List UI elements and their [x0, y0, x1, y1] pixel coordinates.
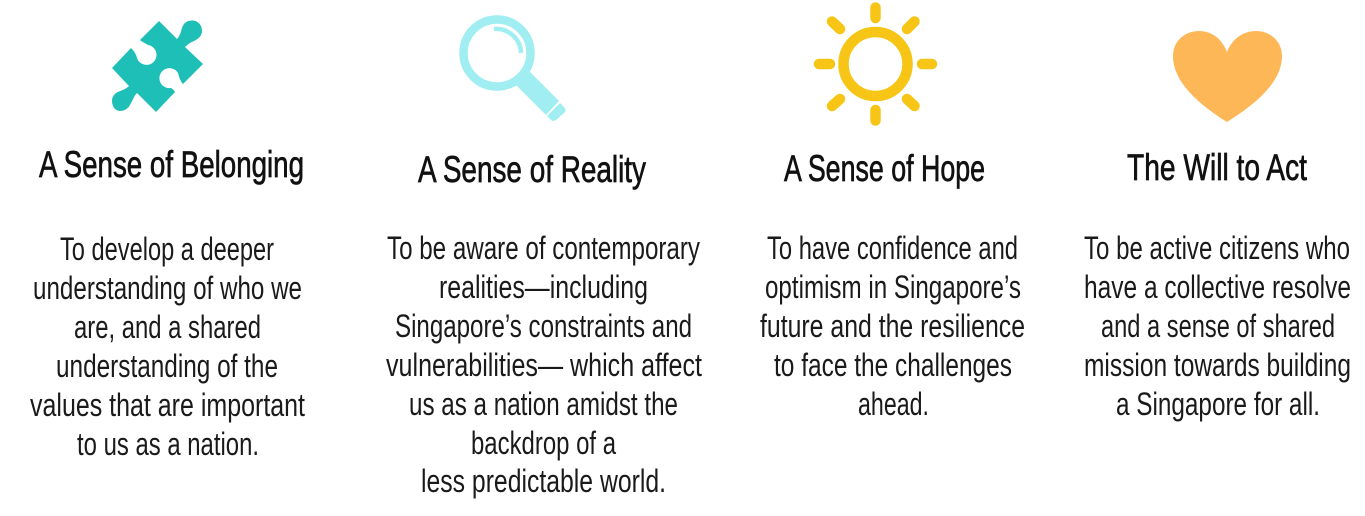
heading: A Sense of Belonging: A Sense of Belonging — [39, 144, 304, 185]
text block: hope description — [760, 230, 1025, 422]
text block: belonging description: to us as a nation. — [77, 426, 259, 462]
icon: heart — [1173, 31, 1282, 122]
icon: magnifying glass — [464, 20, 566, 121]
text block: belonging description: values that are important — [30, 387, 305, 423]
text block: will to act description — [1084, 230, 1351, 422]
text block: belonging description: To develop a deeper — [60, 231, 274, 267]
text block: reality description: backdrop of a — [471, 425, 616, 461]
text block: belonging description: understanding of the — [56, 348, 278, 384]
text block: hope description: to face the challenges — [774, 347, 1012, 383]
text block: hope description: To have confidence and — [767, 230, 1018, 266]
icon: puzzle piece — [112, 20, 203, 112]
text block: reality description: To be aware of contemporary — [387, 230, 700, 266]
text block: reality description — [386, 230, 702, 499]
text block: hope description: optimism in Singapore’s — [765, 269, 1021, 305]
heading: A Sense of Hope: A Sense of Hope — [784, 148, 985, 189]
text block: reality description: vulnerabilities— which affect — [386, 347, 702, 383]
text block: reality description: less predictable world. — [421, 463, 666, 499]
icon: sun — [819, 8, 932, 120]
text block: belonging description — [30, 231, 305, 462]
text block: belonging description: understanding of who we — [33, 270, 302, 306]
text block: reality description: realities—including — [439, 269, 648, 305]
text block: belonging description: are, and a shared — [74, 309, 261, 345]
text block: hope description: future and the resilience — [760, 308, 1025, 344]
text block: hope description: ahead. — [858, 386, 929, 422]
text block: reality description: us as a nation amidst the — [409, 386, 678, 422]
heading: The Will to Act: The Will to Act — [1127, 147, 1308, 188]
heading: A Sense of Reality: A Sense of Reality — [418, 149, 646, 190]
text block: reality description: Singapore’s constraints and — [395, 308, 692, 344]
